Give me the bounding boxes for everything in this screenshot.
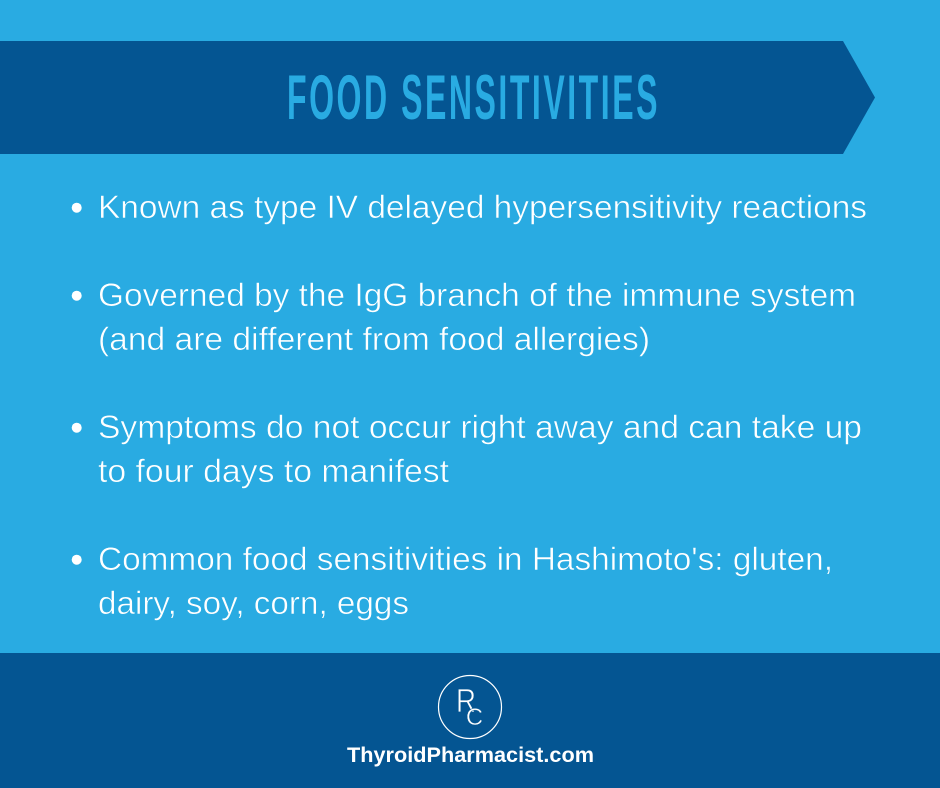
footer band	[0, 653, 940, 788]
footer website: ThyroidPharmacist.com	[347, 744, 594, 767]
bullet 4: Common food sensitivities in Hashimoto's: gluten,	[98, 541, 833, 577]
bullet 1: Known as type IV delayed hypersensitivity reactions	[98, 189, 867, 225]
bullet 4	[72, 541, 833, 621]
icon: RC logo	[438, 676, 502, 738]
bullet 4: dairy, soy, corn, eggs	[98, 585, 409, 621]
bullet 3	[72, 409, 862, 489]
bullet list	[72, 189, 867, 621]
bullet 2	[72, 277, 856, 357]
bullet 3: Symptoms do not occur right away and can take up	[98, 409, 862, 445]
bullet 2: Governed by the IgG branch of the immune system	[98, 277, 856, 313]
bullet 2: (and are different from food allergies)	[98, 321, 650, 357]
title banner arrow	[0, 41, 875, 154]
icon: RC logo: C	[466, 704, 483, 731]
icon: RC logo: R	[456, 682, 476, 719]
bullet 3: to four days to manifest	[98, 453, 449, 489]
